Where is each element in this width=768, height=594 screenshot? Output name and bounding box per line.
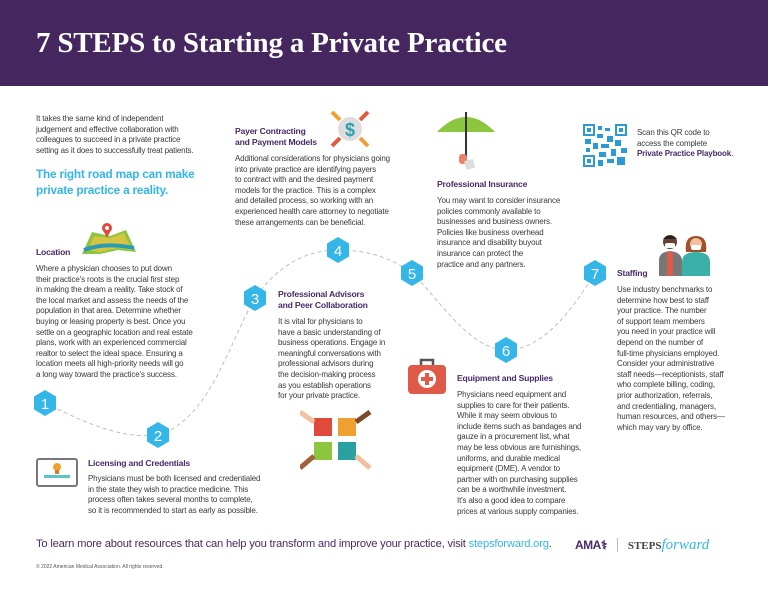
section: professional advisors: for your private practice.	[278, 391, 360, 400]
QR caption: Private Practice Playbook.	[637, 149, 733, 158]
blue headline: The right road map can make	[36, 167, 194, 181]
icon: QR code	[583, 124, 627, 167]
icon: staff people	[659, 235, 710, 276]
icon: medical kit	[408, 358, 446, 394]
section: professional insurance: You may want to consider insurance	[437, 196, 560, 205]
section: professional advisors: business operations. Engage in	[278, 338, 385, 347]
section: staffing: you need in your practice will	[617, 327, 715, 336]
path with step markers: 7	[591, 266, 599, 283]
path with step markers: 5	[408, 266, 416, 283]
QR caption: access the complete	[637, 139, 707, 148]
section: professional insurance: Policies like business overhead	[437, 228, 544, 237]
intro text: It takes the same kind of independent	[36, 114, 163, 123]
path with step markers: 6	[502, 343, 510, 360]
section: equipment: partner with on purchasing supplies	[457, 475, 578, 484]
icon: puzzle hands	[300, 410, 372, 470]
logos: AMA⚕ STEPSforward	[575, 537, 709, 553]
section: payer contracting: models for the practice. This is a complex	[235, 186, 376, 195]
section: professional insurance: insurance can protect the	[437, 249, 523, 258]
section: professional advisors: meaningful conversations with	[278, 349, 381, 358]
section: equipment: It's also a good idea to compare	[457, 496, 565, 505]
icon: certificate	[36, 458, 78, 487]
intro text	[36, 114, 193, 155]
section: licensing: process often takes several months to complete,	[88, 495, 253, 504]
section: staffing: your practice. The number	[617, 306, 706, 315]
section: equipment: uniforms, and durable medical	[457, 454, 560, 463]
section: licensing: Licensing and Credentials	[88, 458, 190, 468]
intro text: judgement and effective collaboration with	[36, 125, 179, 134]
section: equipment: equipment (DME). A vendor to	[457, 464, 560, 473]
section: payer contracting: and Payment Models	[235, 137, 317, 147]
section: payer contracting	[235, 126, 390, 227]
section: location: the local market and assess the needs of the	[36, 296, 188, 305]
section: equipment	[457, 373, 581, 516]
section: licensing: in the state they wish to practice medicine. This	[88, 485, 248, 494]
section: staffing: staff needs—receptionists, staff	[617, 370, 724, 379]
section: payer contracting: Payer Contracting	[235, 126, 306, 136]
section: staffing: Staffing	[617, 268, 647, 278]
section: equipment: While it may seem obvious to	[457, 411, 557, 420]
section: staffing: prior authorization, referrals,	[617, 391, 712, 400]
icon: dollar arrows: $	[345, 120, 355, 140]
section: location: settle on a geographic location and real estate	[36, 328, 193, 337]
section: licensing	[88, 458, 260, 515]
section: equipment: may be less obvious are furnishings,	[457, 443, 581, 452]
section: equipment: supplies to care for their patients.	[457, 401, 569, 410]
section: professional insurance: practice and any partners.	[437, 260, 526, 269]
section: professional advisors	[278, 289, 385, 400]
footer call to action: To learn more about resources that can help you transform and improve your practice, visit stepsforward.org.	[36, 538, 552, 550]
blue headline	[36, 167, 194, 197]
section: equipment: Equipment and Supplies	[457, 373, 553, 383]
section: location: realtor to select the ideal space. Ensuring a	[36, 349, 183, 358]
section: staffing: of support team members	[617, 317, 705, 326]
section: professional advisors: professional advisors during	[278, 359, 373, 368]
path with step markers: 3	[251, 291, 259, 308]
section: staffing	[617, 268, 725, 432]
section: professional insurance: businesses and business owners.	[437, 217, 552, 226]
section: professional advisors: and Peer Collaboration	[278, 300, 368, 310]
section: payer contracting: experienced health care attorney to negotiate	[235, 207, 389, 216]
section: professional advisors: have a basic understanding of	[278, 328, 380, 337]
section: equipment: prices at various supply companies.	[457, 507, 578, 516]
section: location: a long way toward the practice's success.	[36, 370, 177, 379]
section: location	[36, 247, 193, 379]
section: equipment: can be a worthwhile investment.	[457, 485, 566, 494]
section: location: Where a physician chooses to put down	[36, 264, 172, 273]
section: professional insurance: policies commonly available to	[437, 207, 541, 216]
section: equipment: gauze in a procurement list, what	[457, 432, 569, 441]
copyright: © 2022 American Medical Association. All rights reserved.	[36, 564, 164, 570]
title: 7 STEPS to Starting a Private Practice	[36, 27, 507, 59]
QR caption: Scan this QR code to	[637, 128, 710, 137]
section: payer contracting: Additional considerations for physicians going	[235, 154, 390, 163]
section: professional advisors: the decision-making process	[278, 370, 375, 379]
section: equipment: Physicians need equipment and	[457, 390, 566, 399]
intro text: setting as it does to successfully treat patients.	[36, 146, 193, 155]
section: professional advisors: as you establish operations	[278, 381, 371, 390]
icon: map	[82, 223, 136, 254]
QR caption	[637, 128, 733, 158]
section: payer contracting: these arrangements can be beneficial.	[235, 218, 365, 227]
section: location: buying or leasing property is best. Once you	[36, 317, 186, 326]
intro text: colleagues to succeed in a private practice	[36, 135, 180, 144]
header banner	[0, 0, 768, 86]
section: staffing: determine how best to staff	[617, 296, 709, 305]
section: professional advisors: It is vital for physicians to	[278, 317, 363, 326]
section: professional insurance: insurance and disability buyout	[437, 238, 542, 247]
section: location: their practice's roots is the crucial first step	[36, 275, 179, 284]
section: location: plans, work with an experienced commercial	[36, 338, 187, 347]
section: staffing: Use industry benchmarks to	[617, 285, 712, 294]
path with step markers: 2	[154, 428, 162, 445]
section: licensing: so it is recommended to start as early as possible.	[88, 506, 258, 515]
blue headline: private practice a reality.	[36, 183, 168, 197]
section: staffing: human resources, and others—	[617, 412, 725, 421]
icon: dollar arrows	[330, 110, 370, 148]
section: staffing: and credentialing, managers,	[617, 402, 716, 411]
section: equipment: include items such as bandages and	[457, 422, 581, 431]
section: licensing: Physicians must be both licensed and credentialed	[88, 474, 260, 483]
path with step markers: 1	[41, 396, 49, 413]
section: staffing: which may vary by office.	[617, 423, 702, 432]
section: professional insurance	[437, 179, 560, 269]
section: location: in making the dream a reality. Take stock of	[36, 285, 183, 294]
section: professional insurance: Professional Insurance	[437, 179, 527, 189]
path with step markers: 4	[334, 243, 342, 260]
section: payer contracting: into private practice are identifying payers	[235, 165, 376, 174]
section: staffing: Consider your administrative	[617, 359, 714, 368]
section: professional advisors: Professional Advisors	[278, 289, 364, 299]
section: location: location meets all high-priority needs will go	[36, 359, 183, 368]
section: payer contracting: and detailed process, so working with an	[235, 196, 373, 205]
section: location: Location	[36, 247, 70, 257]
section: staffing: who complete billing, coding,	[617, 380, 715, 389]
section: location: population in that area. Determine whether	[36, 306, 181, 315]
section: staffing: depend on the number of	[617, 338, 703, 347]
section: staffing: full-time physicians employed.	[617, 349, 719, 358]
section: payer contracting: to contract with and the desired payment	[235, 175, 373, 184]
icon: umbrella	[437, 112, 495, 170]
